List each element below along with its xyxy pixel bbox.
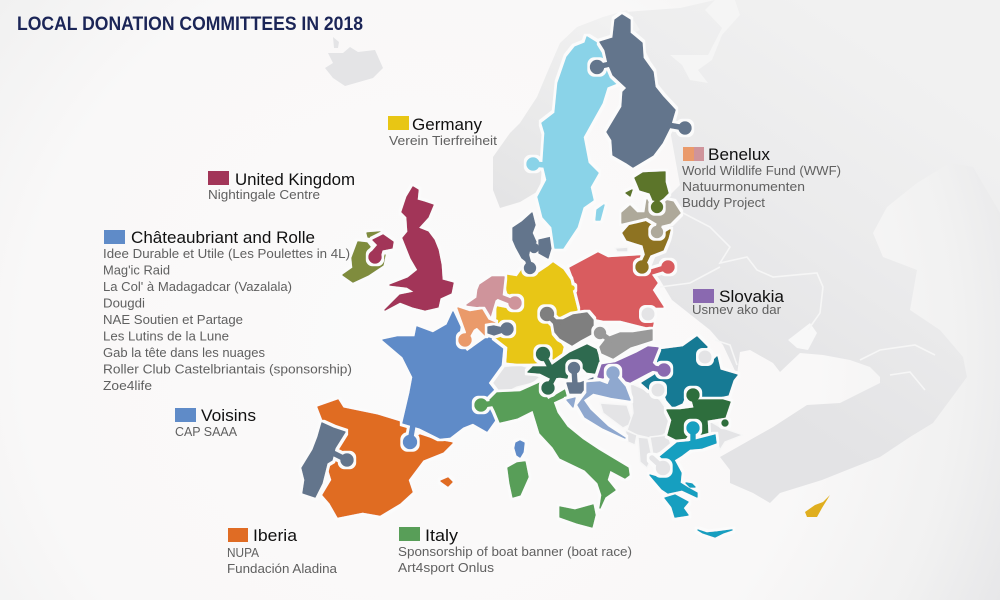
- legend: Châteaubriant and Rolle: Gab la tête dans les nuages: [103, 346, 265, 360]
- czech republic: [540, 308, 593, 345]
- legend: Châteaubriant and Rolle: [103, 229, 352, 393]
- legend: United Kingdom: United Kingdom: [235, 171, 355, 189]
- grey knob into greece: [652, 458, 670, 474]
- lithuania: [623, 220, 670, 273]
- slovenia: [567, 362, 593, 393]
- legend: Benelux: Benelux: [708, 146, 771, 164]
- legend: United Kingdom: Nightingale Centre: [208, 188, 320, 202]
- croatia: [567, 367, 630, 438]
- legend: Châteaubriant and Rolle: La Col' à Madagadcar (Vazalala): [103, 280, 292, 294]
- legend: Châteaubriant and Rolle: Mag'ic Raid: [103, 264, 170, 278]
- legend: Benelux: [682, 146, 841, 210]
- cyprus: [805, 495, 830, 517]
- legend: Germany: Germany: [412, 116, 483, 134]
- legend: Châteaubriant and Rolle: Idee Durable et Utile (Les Poulettes in 4L): [103, 247, 350, 261]
- legend: Châteaubriant and Rolle: NAE Soutien et Partage: [103, 313, 243, 327]
- romania: [642, 337, 737, 407]
- france: [383, 312, 524, 457]
- legend: Voisins: Voisins: [201, 407, 256, 425]
- grey land: Russia, Ukraine, Belarus, Turkey: [625, 0, 1000, 503]
- legend: Benelux: World Wildlife Fund (WWF): [682, 164, 841, 178]
- legend: Châteaubriant and Rolle: Roller Club Castelbriantais (sponsorship): [103, 362, 352, 376]
- united kingdom: [385, 187, 453, 310]
- bulgaria: [667, 389, 730, 442]
- legend: Italy: [398, 527, 632, 575]
- norway: [493, 10, 640, 208]
- legend: Benelux: Buddy Project: [682, 196, 766, 210]
- finland: [590, 15, 691, 167]
- legend: Slovakia: Usmev ako dar: [692, 303, 781, 317]
- spain: [318, 400, 452, 517]
- legend: Italy: Art4sport Onlus: [398, 561, 494, 575]
- netherlands: [467, 277, 521, 317]
- sweden: [527, 37, 617, 248]
- legend: Slovakia: Slovakia: [719, 288, 785, 306]
- iceland: [325, 37, 383, 86]
- denmark: [513, 213, 552, 274]
- legend: Châteaubriant and Rolle: Les Lutins de la Lune: [103, 330, 229, 344]
- legend: Italy: Italy: [425, 527, 459, 545]
- legend: Châteaubriant and Rolle: Dougdi: [103, 296, 145, 310]
- legend: Benelux: Natuurmonumenten: [682, 180, 805, 194]
- legend: Châteaubriant and Rolle: Zoe4life: [103, 379, 152, 393]
- title: LOCAL DONATION COMMITTEES IN 2018: [17, 14, 363, 35]
- latvia: [622, 200, 680, 238]
- grey knob into poland: [642, 308, 654, 320]
- legend: Slovakia: [692, 288, 785, 317]
- legend: Iberia: Iberia: [253, 527, 298, 545]
- slovakia: [594, 328, 652, 358]
- portugal: [302, 423, 353, 497]
- luxembourg: [488, 323, 513, 335]
- hungary: [598, 347, 670, 382]
- legend: Italy: Sponsorship of boat banner (boat race): [398, 545, 632, 559]
- austria: [528, 345, 599, 394]
- greece: [650, 422, 732, 537]
- map of committee countries: [302, 15, 830, 537]
- belgium: [458, 308, 495, 346]
- legend: Voisins: CAP SAAA: [175, 425, 238, 439]
- poland: [570, 253, 674, 328]
- legend: Voisins: [175, 407, 256, 439]
- legend: United Kingdom: [208, 171, 355, 202]
- estonia: [626, 172, 668, 212]
- italy: [475, 380, 629, 527]
- legend: Germany: [388, 116, 498, 148]
- grey knobs into romania: [652, 350, 712, 396]
- northern ireland: [369, 235, 393, 263]
- germany: [495, 263, 577, 363]
- grey non-member countries: [488, 247, 743, 468]
- legend: Châteaubriant and Rolle: Châteaubriant and Rolle: [131, 229, 315, 247]
- legend: Germany: Verein Tierfreiheit: [389, 134, 498, 148]
- legend: Iberia: NUPA: [227, 546, 260, 560]
- legend: Iberia: [227, 527, 337, 576]
- ireland: [343, 232, 385, 282]
- legend: Iberia: Fundación Aladina: [227, 562, 337, 576]
